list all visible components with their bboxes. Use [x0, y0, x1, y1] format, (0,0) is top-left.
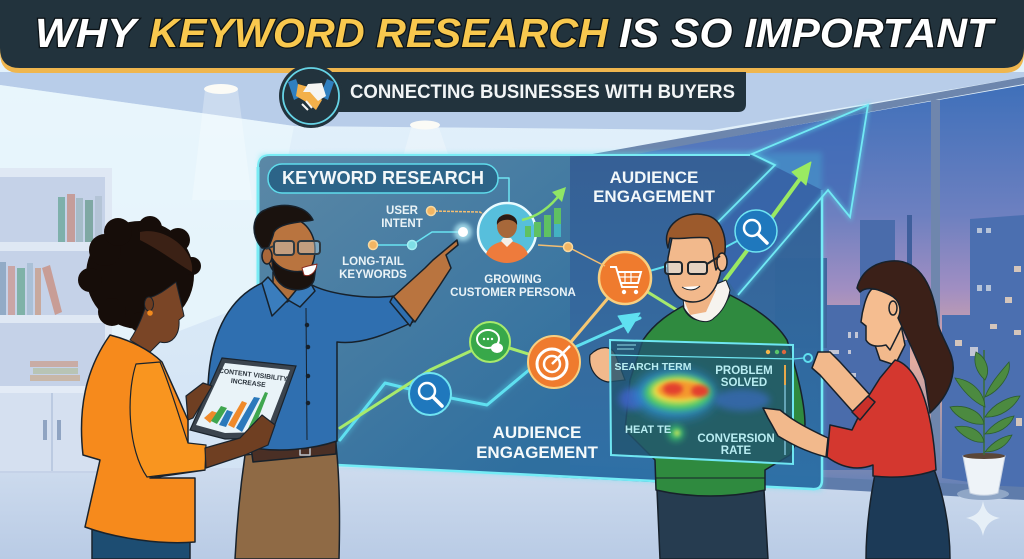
title: KEYWORD RESEARCH [149, 10, 609, 56]
title [35, 10, 996, 56]
growing customer persona label: CUSTOMER PERSONA [450, 287, 576, 299]
heat map panel [610, 340, 793, 464]
hands holding tablet [186, 383, 275, 468]
growing customer persona label: GROWING [484, 274, 542, 286]
heat map panel: PROBLEM [715, 365, 773, 377]
person: man in green sweater [625, 214, 805, 559]
long-tail keywords label: LONG-TAIL [342, 256, 404, 268]
person: woman with tablet [78, 216, 206, 559]
keyword research label [268, 164, 498, 193]
holographic panel [258, 152, 822, 490]
person: woman in red top [763, 261, 953, 559]
chart lines [340, 162, 811, 440]
plant in white pot [950, 350, 1020, 500]
connector lines to persona [368, 178, 605, 266]
icon: handshake badge [279, 64, 343, 128]
icon: target node [528, 336, 580, 388]
heat map panel: SEARCH TERM [614, 361, 692, 373]
sparkle [966, 501, 1000, 536]
heat map panel: CONVERSION [697, 433, 775, 445]
big growth arrow [700, 105, 868, 295]
icon: shopping cart node [599, 252, 651, 304]
tablet: content visibility increase [190, 358, 296, 439]
user intent label: USER [386, 205, 419, 217]
bookshelf [0, 168, 112, 473]
tablet: content visibility increase: CONTENT VISIBILITY [218, 368, 288, 383]
heat map panel: RATE [721, 445, 752, 457]
audience engagement label lower: AUDIENCE [493, 423, 581, 442]
audience engagement label lower: ENGAGEMENT [476, 443, 599, 462]
subtitle ribbon: CONNECTING BUSINESSES WITH BUYERS [350, 82, 735, 103]
title: IS SO IMPORTANT [619, 10, 996, 56]
header banner [0, 0, 1024, 73]
icon: chat bubbles node [470, 322, 510, 362]
title: WHY [35, 10, 140, 56]
window with city skyline [570, 77, 1024, 500]
customer persona avatar [478, 187, 566, 263]
heat blobs [619, 370, 770, 441]
heat map panel: HEAT TE [625, 424, 671, 436]
user intent label: INTENT [381, 218, 423, 230]
heat map panel: SOLVED [721, 377, 767, 389]
hand: left hand behind heat panel [590, 348, 625, 382]
tablet: content visibility increase: INCREASE [230, 378, 267, 389]
icon: magnifier node upper [735, 210, 777, 252]
person: man in blue shirt pointing [208, 205, 458, 559]
audience engagement label upper: ENGAGEMENT [593, 187, 716, 206]
ceiling lights [192, 84, 450, 200]
long-tail keywords label: KEYWORDS [339, 269, 407, 281]
subtitle ribbon [300, 72, 746, 112]
keyword research label: KEYWORD RESEARCH [282, 168, 484, 188]
icon: magnifier node [409, 373, 451, 415]
audience engagement label upper: AUDIENCE [610, 168, 698, 187]
